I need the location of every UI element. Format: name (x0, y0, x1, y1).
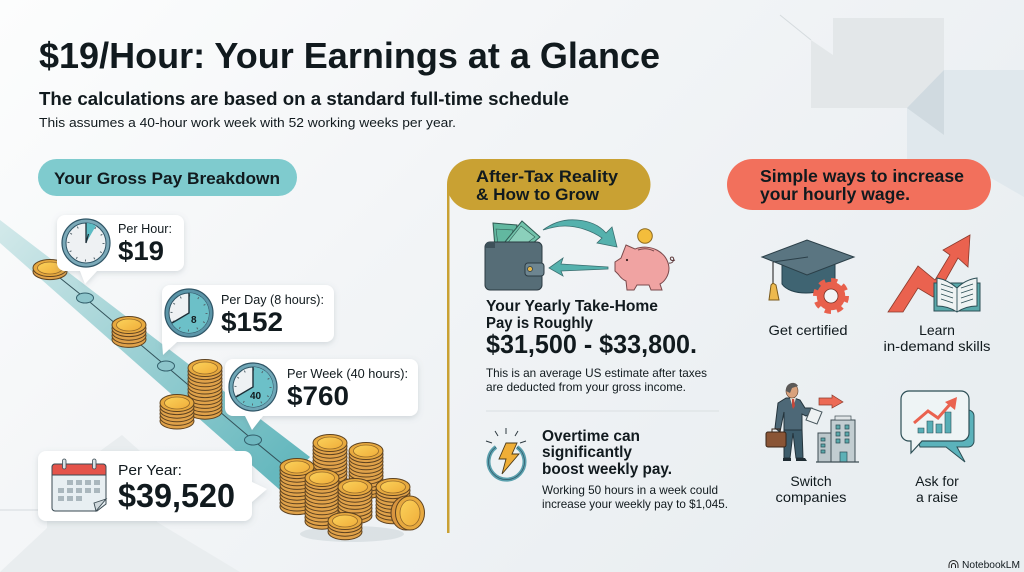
assumption note: This assumes a 40-hour work week with 52 working weeks per year. (39, 116, 456, 130)
icon: calendar (52, 459, 106, 511)
text: learn skills (884, 322, 990, 354)
text: learn skills: in-demand skills (884, 338, 990, 354)
text: learn skills: Learn (919, 322, 955, 338)
take-home note (486, 366, 707, 394)
callout: per year: Per Year: (118, 462, 182, 479)
take-home note: This is an average US estimate after taxes (486, 366, 707, 380)
coin stack: day (112, 316, 146, 347)
text: ask for a raise: Ask for (915, 473, 959, 489)
callout: per hour (57, 215, 184, 284)
text: ask for a raise: a raise (916, 489, 958, 505)
overtime heading: significantly (542, 444, 632, 461)
take-home range: $31,500 - $33,800. (486, 329, 697, 359)
heading: gross pay (38, 159, 297, 196)
take-home heading: Your Yearly Take-Home (486, 298, 658, 315)
text: switch companies: companies (776, 489, 846, 505)
icon: graduation cap (762, 240, 854, 311)
overtime heading: Overtime can (542, 428, 640, 445)
text: switch companies: Switch (790, 473, 832, 489)
overtime heading: boost weekly pay. (542, 461, 672, 478)
heading: simple ways (727, 159, 991, 210)
callout: per week: Per Week (40 hours): (287, 366, 408, 381)
overtime heading (542, 428, 672, 478)
heading: gross pay: Your Gross Pay Breakdown (54, 169, 280, 188)
callout: per day: Per Day (8 hours): (221, 292, 324, 307)
heading: after-tax (447, 159, 651, 210)
callout: per year (38, 451, 267, 521)
overtime note: Working 50 hours in a week could (542, 483, 718, 497)
text: ask for a raise (915, 473, 959, 505)
icon: person switching companies (766, 383, 859, 462)
take-home heading (486, 298, 658, 332)
callout: per year: $39,520 (118, 477, 235, 514)
heading: simple ways: Simple ways to increase (760, 166, 964, 186)
callout: per hour: $19 (118, 236, 164, 266)
icon: week clock (229, 363, 277, 411)
heading: after-tax: & How to Grow (476, 185, 600, 204)
callout: per day (162, 285, 334, 355)
coin pile: year (280, 434, 424, 542)
coin stacks: week (160, 360, 222, 429)
icon: day clock: 8 (191, 315, 197, 326)
icon: week clock: 40 (250, 391, 262, 402)
callout: per day: $152 (221, 307, 283, 337)
overtime note: increase your weekly pay to $1,045. (542, 497, 728, 511)
coin: single (33, 260, 67, 280)
take-home heading: Pay is Roughly (486, 315, 593, 332)
icon: arrow and book (888, 235, 980, 312)
panel: after-tax (447, 159, 728, 533)
heading: after-tax: After-Tax Reality (476, 167, 619, 186)
icon: hour clock (62, 219, 110, 267)
subtitle: The calculations are based on a standard full-time schedule (39, 89, 569, 109)
watermark: NotebookLM: NotebookLM (962, 559, 1020, 571)
title: $19/Hour: Your Earnings at a Glance (39, 35, 660, 76)
text: switch companies (776, 473, 846, 505)
callout: per hour: Per Hour: (118, 221, 172, 236)
icon: chat with chart (901, 391, 974, 462)
panel: raise your wage (727, 159, 991, 505)
overtime note (542, 483, 728, 511)
heading: simple ways: your hourly wage. (760, 184, 910, 204)
timeline ribbon (0, 220, 310, 490)
icon: lightning power (486, 428, 526, 480)
take-home note: are deducted from your gross income. (486, 380, 686, 394)
callout: per week (225, 359, 418, 430)
callout: per week: $760 (287, 381, 349, 411)
icon: wallet and piggy bank (485, 220, 675, 290)
icon: day clock (165, 289, 213, 337)
text: get certified: Get certified (768, 322, 848, 338)
